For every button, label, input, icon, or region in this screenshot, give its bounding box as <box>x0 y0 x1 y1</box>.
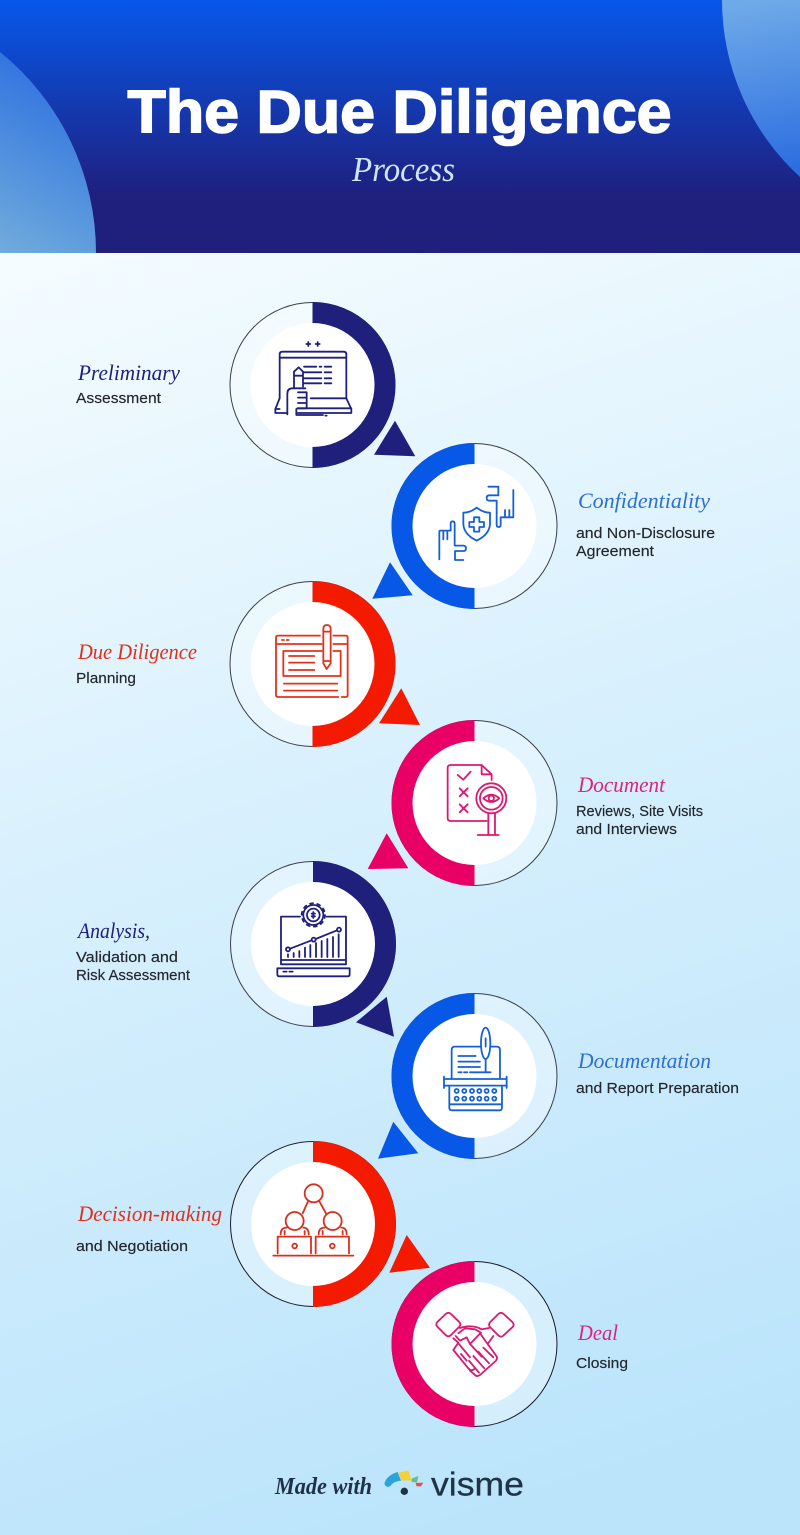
arrow 2 <box>372 562 413 599</box>
made with text: Made with <box>274 1474 372 1500</box>
text: Analysis <box>76 918 190 984</box>
text: Document Reviews: Document <box>577 772 666 797</box>
step 6: Documentation <box>392 993 739 1159</box>
icon: typewriter with quill <box>444 1028 507 1110</box>
ring 2 <box>392 443 557 609</box>
text: Decision-making: Decision-making <box>77 1201 222 1226</box>
text: Due Diligence Planning: Planning <box>76 671 136 687</box>
icon: laptop with chart and gear <box>277 903 350 976</box>
icon: checklist with magnifier <box>448 765 506 835</box>
arrow 7 <box>389 1235 430 1273</box>
step 2: Confidentiality <box>392 443 715 609</box>
text: Document Reviews <box>576 772 703 838</box>
text: Analysis: Analysis, <box>76 918 150 943</box>
text: Analysis: Validation and <box>76 950 178 966</box>
text: Document Reviews: Reviews, Site Visits <box>576 804 703 820</box>
text: Documentation: and Report Preparation <box>576 1081 739 1097</box>
ring 8 <box>392 1261 557 1427</box>
arrow 5 <box>356 997 394 1037</box>
icon: team decision tree <box>273 1184 353 1256</box>
icon: planning window with pencil <box>276 625 348 697</box>
arrow 6 <box>378 1122 418 1159</box>
text: Confidentiality: Agreement <box>576 544 654 560</box>
arrow 1 <box>374 421 415 456</box>
arrow 4 <box>368 833 408 869</box>
step 7: Decision-making <box>76 1141 396 1307</box>
step 1: Preliminary Assessment <box>76 302 395 468</box>
text: Decision-making: and Negotiation <box>76 1239 188 1255</box>
icon: laptop with pencil <box>275 342 351 416</box>
text: Document Reviews: and Interviews <box>576 822 677 838</box>
icon: hands with shield <box>439 487 513 560</box>
step 5: Analysis <box>76 861 396 1027</box>
ring 6 <box>392 993 557 1159</box>
step 4: Document Reviews <box>392 720 703 886</box>
text: Confidentiality: Confidentiality <box>578 488 710 513</box>
text: Confidentiality <box>576 488 715 560</box>
text: Due Diligence Planning <box>76 639 197 687</box>
footer: made with visme <box>274 1466 524 1502</box>
text: Analysis: Risk Assessment <box>76 968 190 984</box>
subtitle: Process <box>351 150 455 189</box>
text: Documentation: Documentation <box>577 1048 711 1073</box>
text: Confidentiality: and Non-Disclosure <box>576 526 715 542</box>
text: Deal Closing <box>576 1320 628 1372</box>
arrow 3 <box>379 688 420 725</box>
icon: handshake <box>436 1313 514 1376</box>
step 8: Deal Closing <box>392 1261 628 1427</box>
icon: visme logo <box>384 1470 423 1495</box>
ring 4 <box>392 720 557 886</box>
text: Preliminary Assessment: Preliminary <box>77 360 180 385</box>
header banner <box>0 0 800 253</box>
decorative circle right <box>722 0 800 177</box>
ring 1 <box>230 302 395 468</box>
text: Preliminary Assessment: Assessment <box>76 391 161 407</box>
ring 7 <box>230 1141 396 1307</box>
visme wordmark: visme <box>431 1466 524 1502</box>
text: Preliminary Assessment <box>76 360 180 407</box>
decorative circle left <box>0 52 96 253</box>
text: Deal Closing: Closing <box>576 1356 628 1372</box>
text: Decision-making <box>76 1201 222 1255</box>
title: The Due Diligence <box>128 78 672 146</box>
text: Documentation <box>576 1048 739 1097</box>
step 3: Due Diligence Planning <box>76 581 395 747</box>
text: Deal Closing: Deal <box>577 1320 618 1345</box>
ring 5 <box>230 861 396 1027</box>
ring 3 <box>230 581 395 747</box>
text: Due Diligence Planning: Due Diligence <box>77 639 197 664</box>
